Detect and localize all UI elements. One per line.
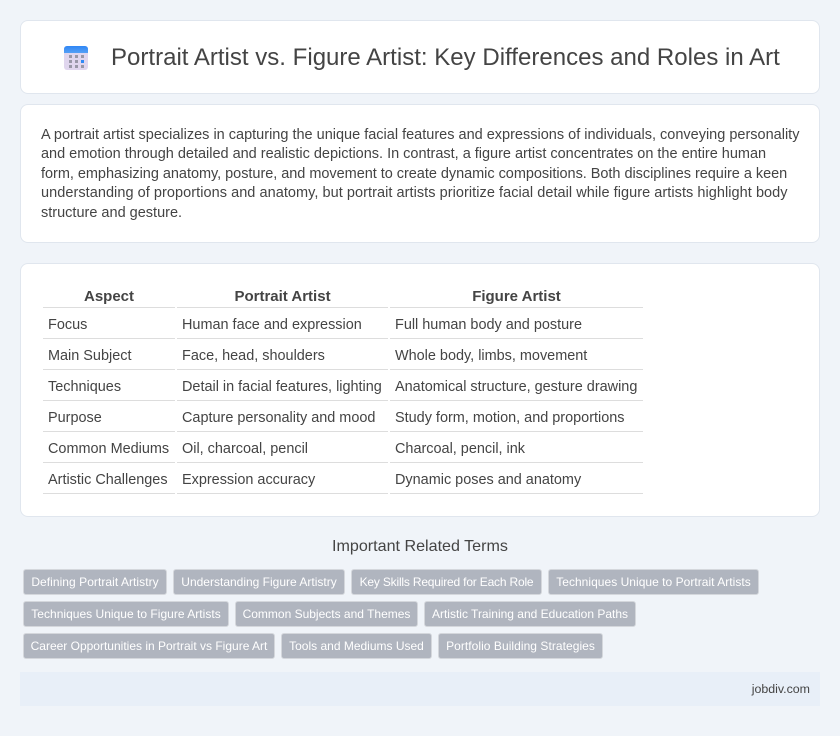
footer credit: jobdiv.com xyxy=(752,682,810,696)
comparison table: Oil, charcoal, pencil xyxy=(182,441,308,457)
comparison table: Figure Artist xyxy=(472,288,561,305)
related terms tags: Techniques Unique to Portrait Artists xyxy=(556,575,751,589)
related terms tags: Common Subjects and Themes xyxy=(243,607,410,621)
footer bar xyxy=(20,672,820,706)
comparison table: Study form, motion, and proportions xyxy=(395,410,625,426)
related terms tags: Defining Portrait Artistry xyxy=(31,575,159,589)
header card xyxy=(20,20,820,94)
panel: comparison table xyxy=(20,263,820,517)
title: Portrait Artist vs. Figure Artist: Key Differences and Roles in Art xyxy=(111,44,780,71)
related terms tags: Artistic Training and Education Paths xyxy=(432,607,628,621)
comparison table: Full human body and posture xyxy=(395,317,582,333)
comparison table: Focus xyxy=(48,317,87,333)
comparison table: Expression accuracy xyxy=(182,472,315,488)
related terms tags: Tools and Mediums Used xyxy=(289,639,424,653)
comparison table: Main Subject xyxy=(48,348,131,364)
comparison table: Whole body, limbs, movement xyxy=(395,348,587,364)
panel: intro text xyxy=(20,104,820,243)
comparison table: Capture personality and mood xyxy=(182,410,375,426)
related terms tags: Career Opportunities in Portrait vs Figure Art xyxy=(31,639,267,653)
intro paragraph: A portrait artist specializes in capturing the unique facial features and expressions of individuals, conveying personality xyxy=(41,127,799,143)
comparison table: Human face and expression xyxy=(182,317,362,333)
related terms tags: Techniques Unique to Figure Artists xyxy=(31,607,221,621)
comparison table: Face, head, shoulders xyxy=(182,348,325,364)
comparison table: Detail in facial features, lighting xyxy=(182,379,382,395)
intro paragraph: and emotion through detailed and realistic depictions. In contrast, a figure artist concentrates on the entire human xyxy=(41,146,766,162)
intro paragraph xyxy=(41,127,800,221)
comparison table: Aspect xyxy=(84,288,134,305)
related terms tags: Key Skills Required for Each Role xyxy=(360,575,533,589)
comparison table: Charcoal, pencil, ink xyxy=(395,441,525,457)
comparison table: Common Mediums xyxy=(48,441,169,457)
comparison table: Artistic Challenges xyxy=(48,472,168,488)
comparison table: Purpose xyxy=(48,410,102,426)
intro paragraph: understanding of proportions and anatomy, but portrait artists prioritize facial detail while figure artists highlight body xyxy=(41,185,788,201)
related terms tags: Portfolio Building Strategies xyxy=(446,639,595,653)
intro paragraph: structure and gesture. xyxy=(41,205,182,221)
related terms tags: Understanding Figure Artistry xyxy=(181,575,337,589)
comparison table xyxy=(43,288,643,494)
related terms tags xyxy=(23,569,759,659)
related terms heading: Important Related Terms xyxy=(332,537,508,555)
intro paragraph: form, emphasizing anatomy, posture, and movement to create dynamic compositions. Both disciplines require a keen xyxy=(41,166,787,182)
comparison table: Dynamic poses and anatomy xyxy=(395,472,581,488)
comparison table: Techniques xyxy=(48,379,121,395)
comparison table: Anatomical structure, gesture drawing xyxy=(395,379,637,395)
comparison table: Portrait Artist xyxy=(234,288,331,305)
icon: calendar xyxy=(64,46,88,70)
